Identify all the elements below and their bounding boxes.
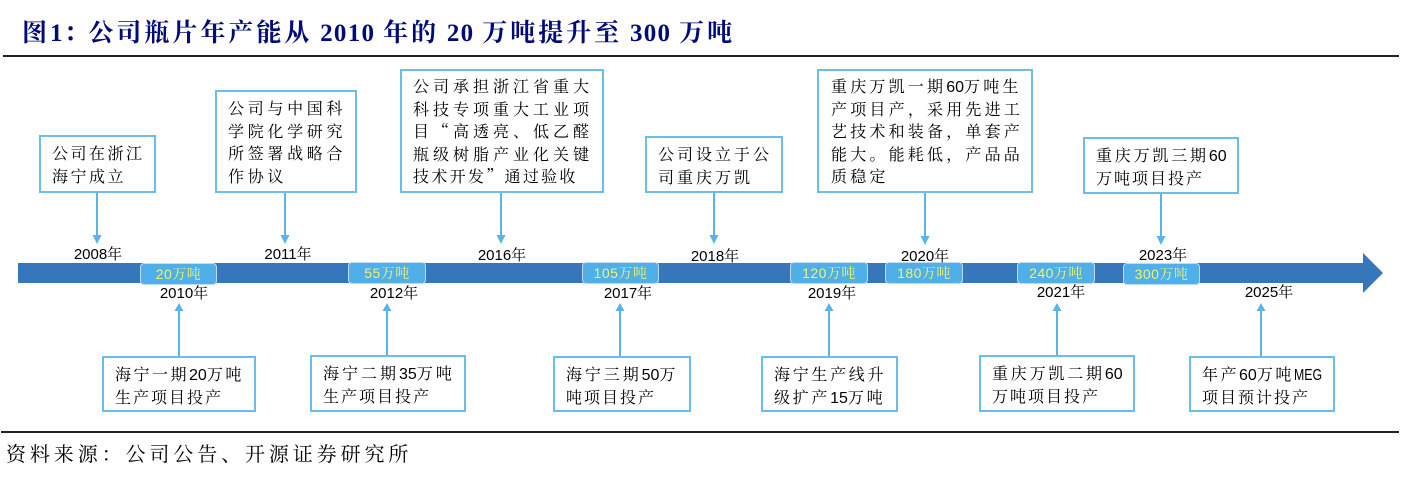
- callout: 2023: [1083, 137, 1239, 194]
- arrow: 2010: [174, 303, 184, 357]
- year: 2017: 2017年: [604, 285, 652, 302]
- callout: 2011: [215, 90, 357, 193]
- year: 2019: 2019年: [808, 285, 856, 302]
- callout: 2025: MEG: [1294, 367, 1322, 384]
- pill: 55万吨: [348, 262, 426, 284]
- source note: 资料来源：公司公告、开源证券研究所: [6, 438, 412, 467]
- pill: 105万吨: 105万吨: [594, 265, 647, 281]
- callout: 2010: 海宁一期20万吨 生产项目投产: [115, 367, 244, 406]
- pill: 300万吨: [1123, 263, 1200, 285]
- callout: 2010: [102, 356, 256, 412]
- arrow: 2017: [616, 303, 624, 357]
- arrow: 2020: [920, 192, 930, 245]
- callout: 2025: [1189, 356, 1335, 412]
- pill: 240万吨: 240万吨: [1029, 265, 1083, 281]
- pill: 120万吨: [790, 262, 868, 284]
- year: 2023: 2023年: [1139, 247, 1187, 264]
- callout: 2008: [39, 135, 156, 193]
- timeline arrow bar: [18, 253, 1383, 293]
- arrow: 2008: [92, 192, 102, 244]
- arrow: 2018: [710, 192, 718, 244]
- year: 2011: 2011年: [264, 246, 312, 263]
- callout: 2018: 公司设立于公 司重庆万凯: [658, 147, 772, 186]
- year: 2020: 2020年: [901, 248, 949, 265]
- pill: 180万吨: [885, 262, 963, 284]
- pill: 105万吨: [582, 262, 659, 284]
- callout: 2012: [310, 355, 466, 412]
- callout: 2025: 年产60万吨 项目预计投产: [1202, 367, 1310, 406]
- callout: 2018: [645, 136, 783, 193]
- title: 图1：公司瓶片年产能从 2010 年的 20 万吨提升至 300 万吨: [22, 13, 735, 49]
- pill: 20万吨: [140, 263, 217, 285]
- callout: 2023: 重庆万凯三期60 万吨项目投产: [1096, 148, 1227, 188]
- arrow: 2025: [1256, 303, 1266, 357]
- year: 2012: 2012年: [370, 285, 418, 302]
- pill: 300万吨: 300万吨: [1135, 266, 1188, 282]
- arrow: 2021: [1052, 303, 1062, 356]
- arrow: 2023: [1156, 192, 1166, 245]
- year: 2018: 2018年: [691, 248, 739, 265]
- year: 2021: 2021年: [1037, 284, 1085, 301]
- arrow: 2019: [824, 303, 834, 357]
- pill: 20万吨: 20万吨: [156, 266, 201, 282]
- year: 2008: 2008年: [74, 246, 122, 263]
- arrow: 2012: [382, 303, 392, 357]
- year: 2025: 2025年: [1245, 284, 1293, 301]
- year: 2016: 2016年: [478, 247, 526, 264]
- arrow: 2016: [496, 192, 506, 244]
- callout: 2019: [761, 356, 898, 412]
- year: 2010: 2010年: [160, 285, 208, 302]
- pill: 240万吨: [1017, 262, 1095, 284]
- pill: 55万吨: 55万吨: [364, 265, 410, 281]
- callout: 2011: 公司与中国科 学院化学研究 所签署战略合 作协议: [228, 101, 346, 186]
- callout: 2016: 公司承担浙江省重大 科技专项重大工业项 目“高透亮、低乙醛 瓶级树脂产业化关键 技术开发”通过验收: [413, 79, 593, 187]
- arrow: 2011: [280, 192, 290, 244]
- callout: 2021: [979, 355, 1135, 412]
- callout: 2017: [553, 356, 691, 412]
- callout: 2012: 海宁二期35万吨 生产项目投产: [323, 366, 455, 406]
- callout: 2021: 重庆万凯二期60 万吨项目投产: [992, 366, 1123, 406]
- pill: 120万吨: 120万吨: [802, 265, 856, 281]
- callout: 2008: 公司在浙江 海宁成立: [52, 146, 145, 186]
- callout: 2020: 重庆万凯一期60万吨生 产项目产，采用先进工 艺技术和装备，单套产 能大。能耗低，产品品 质稳定: [831, 79, 1023, 186]
- callout: 2017: 海宁三期50万 吨项目投产: [566, 367, 678, 406]
- callout: 2019: 海宁生产线升 级扩产15万吨: [774, 367, 886, 406]
- pill: 180万吨: 180万吨: [897, 265, 951, 281]
